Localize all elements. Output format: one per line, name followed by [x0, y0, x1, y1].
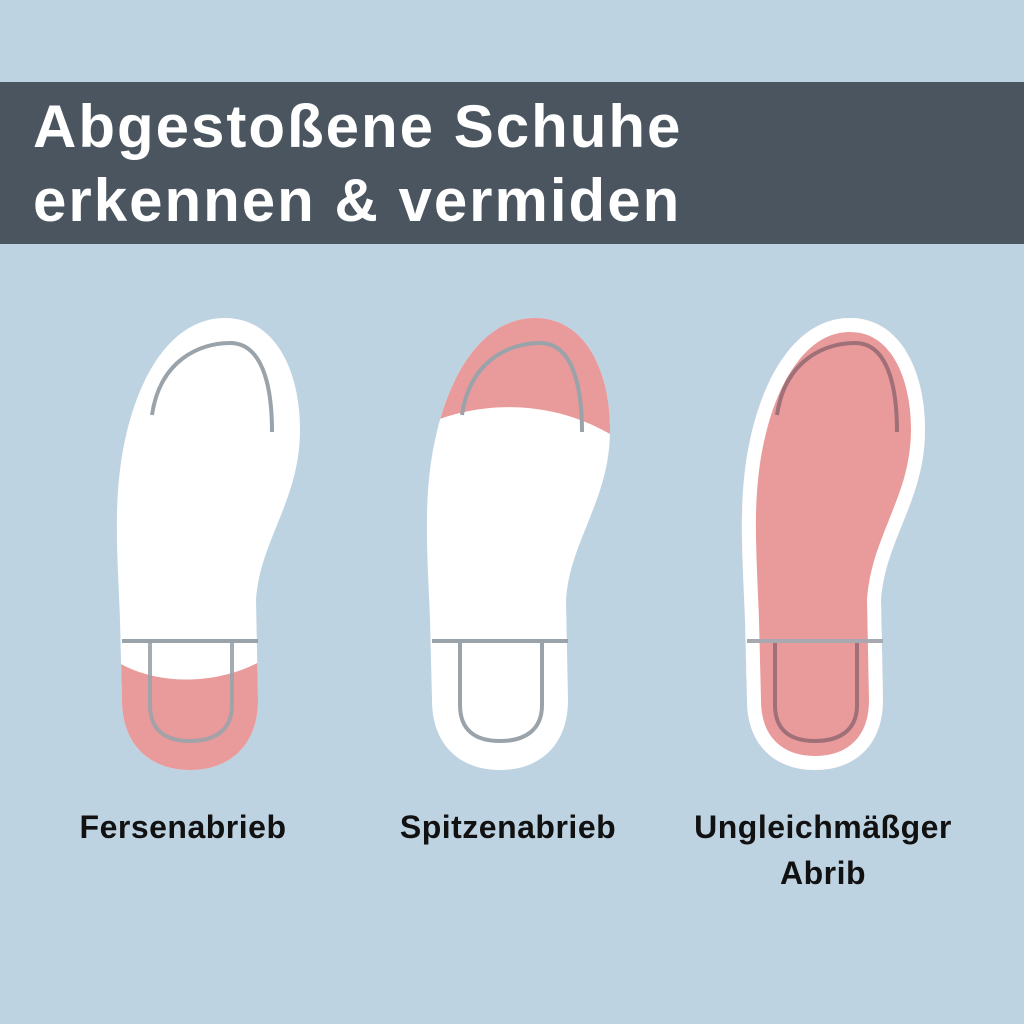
shoe illustrations — [116, 318, 925, 770]
shoe 2: toe wear — [426, 318, 610, 770]
label: Ungleichmäßger Abrib: Abrib — [780, 855, 866, 891]
title — [33, 93, 682, 234]
label: Ungleichmäßger Abrib: Ungleichmäßger — [694, 809, 952, 845]
title bar — [0, 82, 1024, 244]
label: Fersenabrieb: Fersenabrieb — [80, 809, 286, 845]
shoe 3: uneven wear — [742, 318, 925, 770]
label: Ungleichmäßger Abrib — [694, 809, 952, 891]
title: erkennen & vermiden — [33, 167, 681, 234]
label: Spitzenabrieb: Spitzenabrieb — [400, 809, 616, 845]
shoe 1: heel wear — [116, 318, 300, 770]
title: Abgestoßene Schuhe — [33, 93, 682, 160]
